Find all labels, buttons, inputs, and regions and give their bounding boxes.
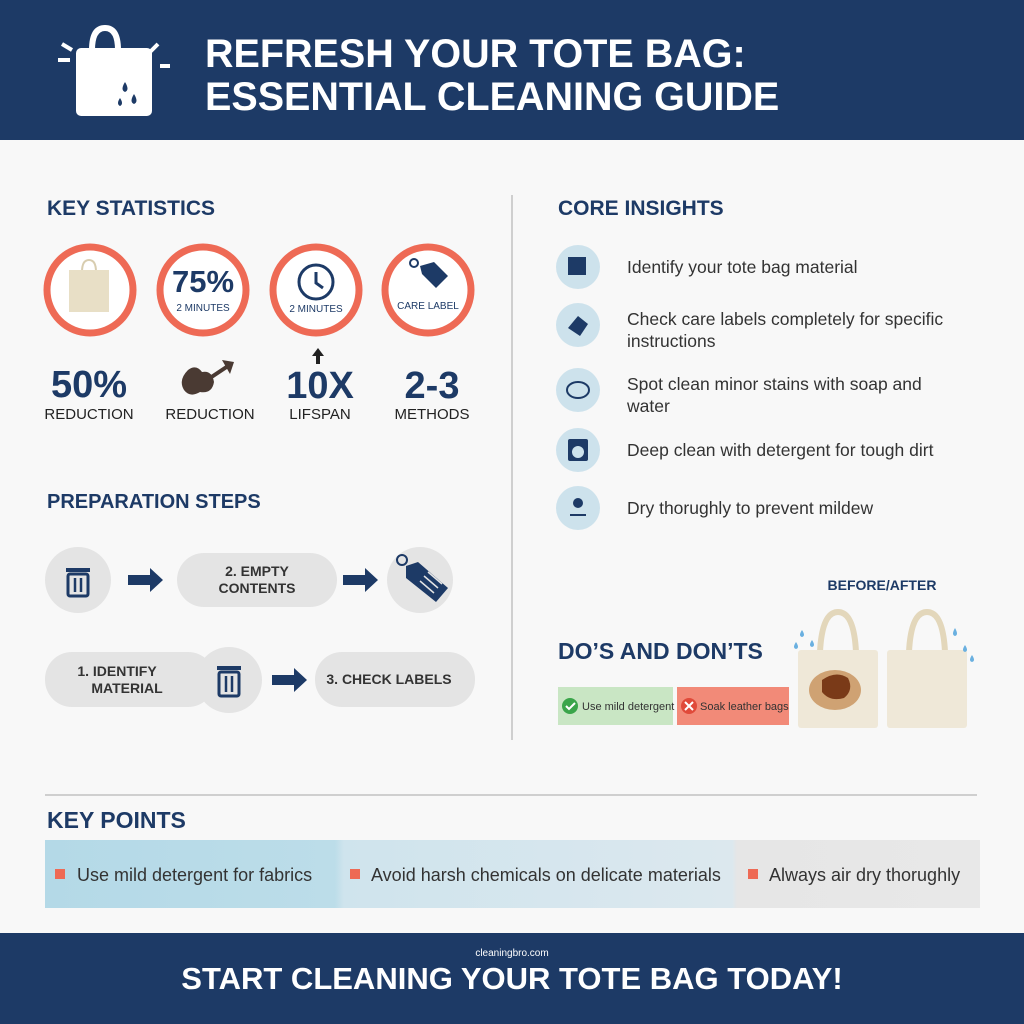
- stat circle 4: care label: [385, 247, 471, 333]
- stat circle 3: clock: [273, 247, 359, 333]
- panel: core insights list: [556, 245, 943, 530]
- step 3 pill: [315, 652, 475, 707]
- illustration: after bag: [887, 612, 974, 728]
- don't box: [677, 687, 789, 725]
- insight 4: [556, 428, 934, 472]
- step 1 pill: MATERIAL: [91, 680, 163, 696]
- step 1 pill: [45, 652, 215, 707]
- insight 3: water: [626, 396, 670, 416]
- header banner: [0, 0, 1024, 140]
- panel: stat numbers: LIFSPAN: [289, 406, 351, 423]
- step 3 pill: 3. CHECK LABELS: [326, 671, 452, 687]
- arrow: [343, 568, 378, 592]
- icon: stain with arrow: [182, 360, 234, 395]
- footer banner: cleaningbro.com: [475, 948, 549, 959]
- step icon: trash: [45, 547, 111, 613]
- panel: key points bar: Always air dry thorughly: [769, 865, 960, 885]
- insight 2: Check care labels completely for specific: [627, 309, 943, 329]
- stat circle 2: 75%: [160, 247, 246, 333]
- footer banner: START CLEANING YOUR TOTE BAG TODAY!: [181, 961, 843, 996]
- stat circle 1: bag: [47, 247, 133, 333]
- panel: stat numbers: [44, 348, 470, 423]
- title: ESSENTIAL CLEANING GUIDE: [205, 75, 779, 119]
- insight 2: [556, 303, 943, 351]
- panel: key points bar: Use mild detergent for fabrics: [77, 865, 312, 885]
- panel: stat numbers: REDUCTION: [165, 406, 255, 423]
- panel: stat numbers: 50%: [51, 364, 127, 406]
- panel: stat numbers: REDUCTION: [44, 406, 134, 423]
- panel: stat circles: [47, 247, 471, 333]
- step 1 pill: 1. IDENTIFY: [77, 663, 157, 679]
- icon: tote bag: [58, 28, 170, 116]
- heading: key points: KEY POINTS: [47, 807, 186, 833]
- insight 3: [556, 368, 922, 416]
- panel: key points bar: Avoid harsh chemicals on delicate materials: [371, 865, 721, 885]
- heading: key statistics: KEY STATISTICS: [47, 197, 215, 220]
- do box: [558, 687, 674, 725]
- step icon: trash 2: [196, 647, 262, 713]
- insight 1: [556, 245, 858, 289]
- arrow: [128, 568, 163, 592]
- do box: Use mild detergent: [582, 701, 674, 713]
- arrow: [272, 668, 307, 692]
- panel: preparation flow: [45, 547, 475, 713]
- heading: before/after: BEFORE/AFTER: [828, 577, 936, 593]
- don't box: Soak leather bags: [700, 701, 789, 713]
- illustration: before bag: [794, 612, 878, 728]
- insight 5: Dry thorughly to prevent mildew: [627, 498, 873, 518]
- panel: stat numbers: METHODS: [394, 406, 470, 423]
- heading: do's and don'ts: DO’S AND DON’TS: [558, 638, 763, 664]
- insight 4: Deep clean with detergent for tough dirt: [627, 440, 934, 460]
- panel: stat numbers: 10X: [286, 365, 354, 407]
- insight 1: Identify your tote bag material: [627, 257, 858, 277]
- footer banner: [0, 933, 1024, 1024]
- title: [205, 32, 779, 119]
- heading: core insights: CORE INSIGHTS: [558, 197, 724, 220]
- insight 5: [556, 486, 873, 530]
- panel: key points bar: [45, 840, 980, 908]
- stat circle 2: 75%: 75%: [172, 264, 234, 299]
- title: REFRESH YOUR TOTE BAG:: [205, 32, 746, 76]
- stat circle 4: care label: CARE LABEL: [397, 301, 459, 312]
- step 2 pill: CONTENTS: [218, 580, 296, 596]
- insight 3: Spot clean minor stains with soap and: [627, 374, 922, 394]
- step icon: tag: [387, 547, 453, 613]
- heading: preparation steps: PREPARATION STEPS: [47, 491, 261, 513]
- step 2 pill: [177, 553, 337, 607]
- insight 2: instructions: [627, 331, 716, 351]
- stat circle 3: clock: 2 MINUTES: [289, 304, 343, 315]
- step 2 pill: 2. EMPTY: [225, 563, 290, 579]
- stat circle 2: 75%: 2 MINUTES: [176, 303, 230, 314]
- panel: stat numbers: 2-3: [405, 365, 459, 407]
